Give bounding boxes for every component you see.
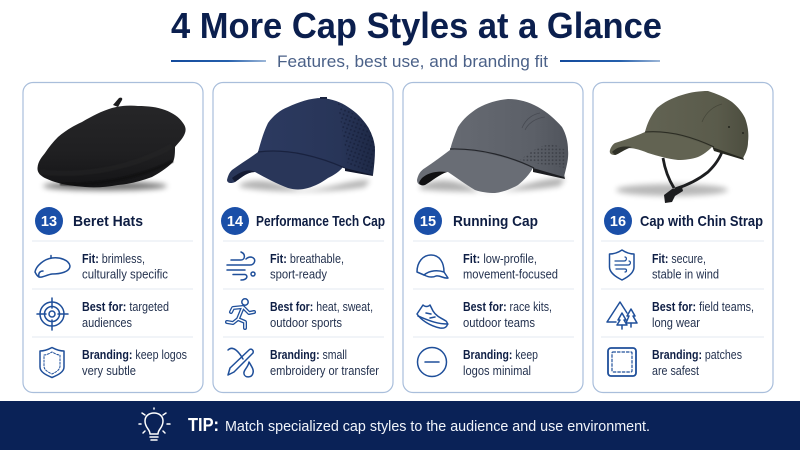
text: fit: Fit: secure, (652, 252, 706, 266)
number badge 16 (604, 207, 632, 235)
icon: stitched patch (608, 348, 636, 376)
tip banner (0, 401, 800, 450)
heading: beret hats: Beret Hats (73, 213, 143, 230)
text: branding (463, 348, 538, 378)
text: best for: outdoor teams (463, 316, 535, 330)
text: best for (652, 300, 754, 330)
icon: target (37, 298, 68, 330)
text: fit (652, 252, 719, 282)
icon: running shoe (417, 305, 448, 328)
icon: pen and drop (228, 348, 253, 377)
text: fit (270, 252, 344, 282)
number badge 15: 15 (420, 214, 436, 230)
text: fit (463, 252, 558, 282)
text: branding: very subtle (82, 364, 136, 378)
text: fit: culturally specific (82, 268, 168, 282)
icon: runner (227, 299, 254, 328)
text: best for: Best for: field teams, (652, 300, 754, 314)
text: best for (463, 300, 552, 330)
image: grey cap (417, 99, 568, 193)
panel: running cap (403, 82, 583, 392)
text: branding (82, 348, 187, 378)
text: branding: Branding: patches (652, 348, 742, 362)
subtitle with rules: Features, best use, and branding fit (277, 52, 548, 71)
text: best for: Best for: race kits, (463, 300, 552, 314)
text: best for: long wear (652, 316, 700, 330)
tip text: Match specialized cap styles to the audience and use environment. (225, 418, 650, 435)
text: branding: Branding: keep (463, 348, 538, 362)
icon: light bulb (139, 408, 170, 440)
text: branding (270, 348, 379, 378)
text: branding: are safest (652, 364, 699, 378)
text: fit: movement-focused (463, 268, 558, 282)
text: branding (652, 348, 742, 378)
number badge 14: 14 (227, 214, 243, 230)
image: olive cap with chin strap (610, 91, 748, 203)
icon: wind shield (610, 250, 634, 280)
text: branding: Branding: keep logos (82, 348, 187, 362)
panel: cap with chin strap (593, 82, 773, 392)
text: best for: audiences (82, 316, 132, 330)
text: fit: Fit: breathable, (270, 252, 344, 266)
icon: mountains and trees (607, 302, 637, 329)
icon: minimal circle (418, 348, 446, 376)
heading: performance tech cap: Performance Tech Cap (256, 213, 385, 230)
text: fit: sport-ready (270, 268, 328, 282)
panel: performance tech cap (213, 82, 393, 392)
icon: cap outline (417, 255, 448, 278)
text: branding: logos minimal (463, 364, 531, 378)
number badge 13 (35, 207, 63, 235)
heading: cap with chin strap: Cap with Chin Strap (640, 213, 763, 230)
icon: shield with stitching (40, 348, 64, 378)
number badge 16: 16 (610, 214, 626, 230)
text: fit: Fit: low-profile, (463, 252, 537, 266)
text: branding: embroidery or transfer (270, 364, 379, 378)
image: navy cap (227, 97, 375, 192)
text: fit: stable in wind (652, 268, 719, 282)
text: best for: Best for: targeted (82, 300, 169, 314)
image: black beret (37, 98, 186, 190)
icon: beret outline (35, 256, 70, 277)
text: best for: Best for: heat, sweat, (270, 300, 373, 314)
heading: running cap: Running Cap (453, 213, 538, 230)
text: best for: outdoor sports (270, 316, 342, 330)
text: branding: Branding: small (270, 348, 347, 362)
text: best for (270, 300, 373, 330)
text: fit (82, 252, 168, 282)
number badge 13: 13 (41, 214, 57, 230)
icon: wind (227, 252, 255, 280)
panel: beret hats (23, 82, 203, 392)
number badge 15 (414, 207, 442, 235)
text: fit: Fit: brimless, (82, 252, 145, 266)
text: best for (82, 300, 169, 330)
title: 4 More Cap Styles at a Glance (171, 5, 662, 46)
number badge 14 (221, 207, 249, 235)
tip text: TIP: (188, 415, 219, 435)
